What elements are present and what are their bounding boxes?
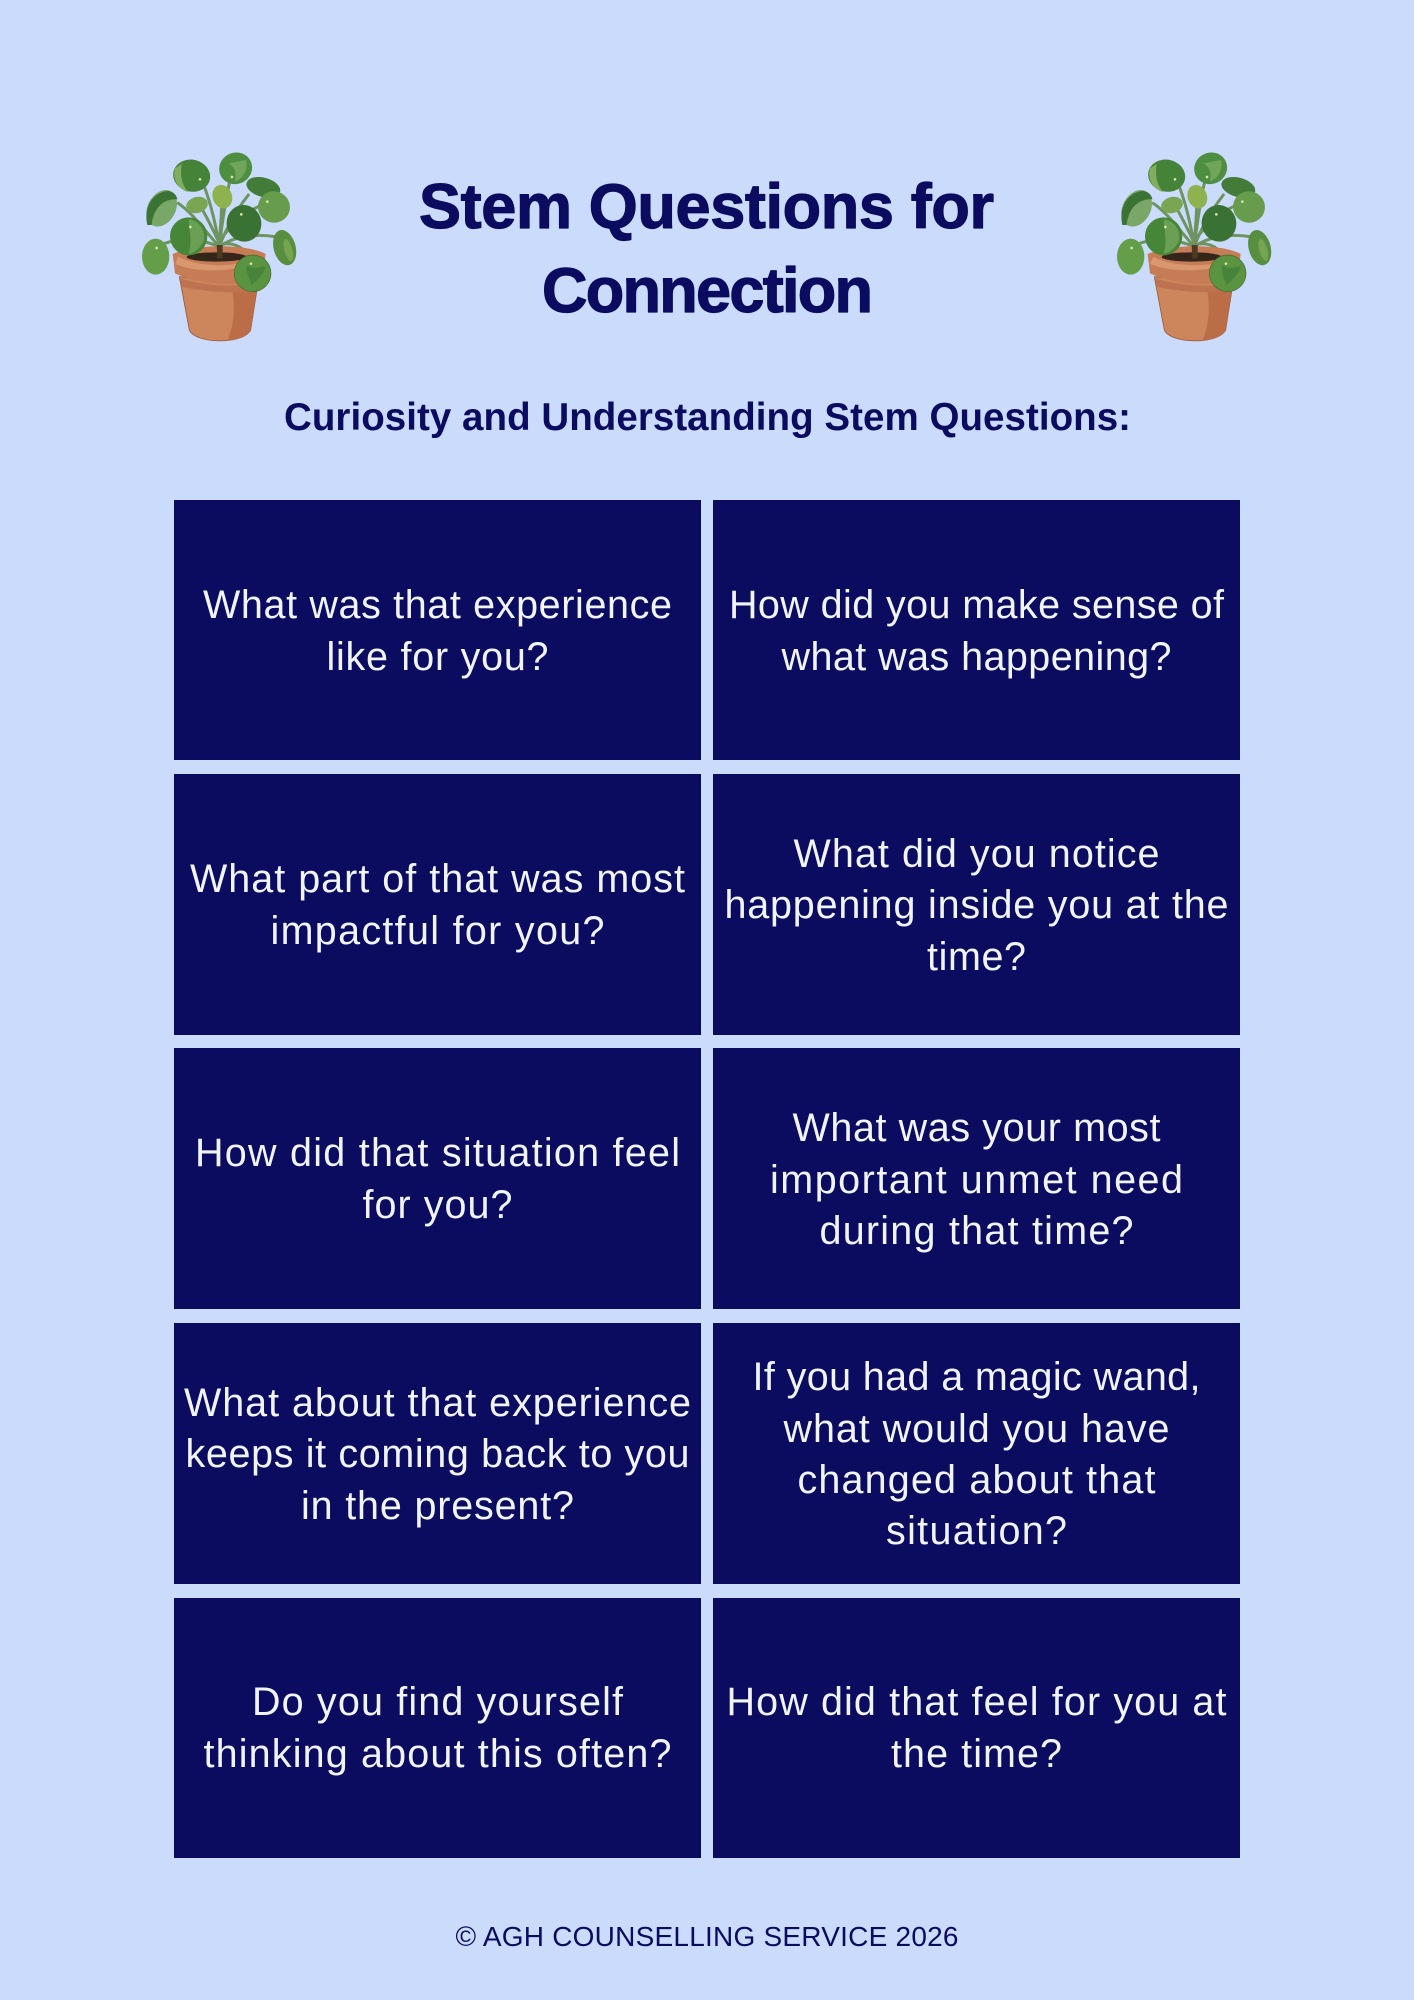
card: unmet need [713,1048,1240,1309]
card: most impactful: impactful for you? [270,909,604,953]
card: experience like: like for you? [326,635,548,679]
icon: left potted plant [140,147,300,341]
card: notice inside [713,774,1240,1035]
card: feel at the time: How did that feel for you at [726,1680,1227,1724]
card: notice inside: time? [927,935,1026,979]
card: unmet need: What was your most [792,1106,1161,1150]
card: magic wand: changed about that [798,1458,1156,1502]
card: most impactful: What part of that was most [190,857,685,901]
title: Stem Questions for [419,172,994,242]
card: feel at the time: the time? [891,1732,1062,1776]
card: situation feel [174,1048,701,1309]
card: coming back: in the present? [301,1484,574,1528]
card: feel at the time [713,1598,1240,1858]
card: situation feel: How did that situation feel [195,1131,680,1175]
icon: right potted plant [1115,147,1275,341]
card: notice inside: What did you notice [794,832,1160,876]
card: unmet need: important unmet need [770,1158,1183,1202]
card: situation feel: for you? [362,1183,512,1227]
card: most impactful [174,774,701,1035]
card: unmet need: during that time? [820,1209,1134,1253]
card: thinking often: Do you find yourself [252,1680,624,1724]
card: thinking often [174,1598,701,1858]
card: coming back: keeps it coming back to you [186,1432,690,1476]
card: make sense: How did you make sense of [729,583,1225,627]
card: coming back: What about that experience [184,1381,691,1425]
card: magic wand: situation? [886,1509,1067,1553]
card: thinking often: thinking about this often? [204,1732,672,1776]
card: make sense [713,500,1240,760]
card: magic wand: what would you have [782,1407,1170,1451]
subtitle: Curiosity and Understanding Stem Questions: [284,396,1131,439]
card: magic wand: If you had a magic wand, [752,1355,1200,1399]
card: make sense: what was happening? [780,635,1172,679]
title [419,172,994,326]
title: Connection [542,256,873,326]
card: coming back [174,1323,701,1584]
card: experience like: What was that experience [203,583,672,627]
card: magic wand [713,1323,1240,1584]
footer copyright: © AGH COUNSELLING SERVICE 2026 [456,1921,958,1952]
card: notice inside: happening inside you at the [724,883,1228,927]
card: experience like [174,500,701,760]
